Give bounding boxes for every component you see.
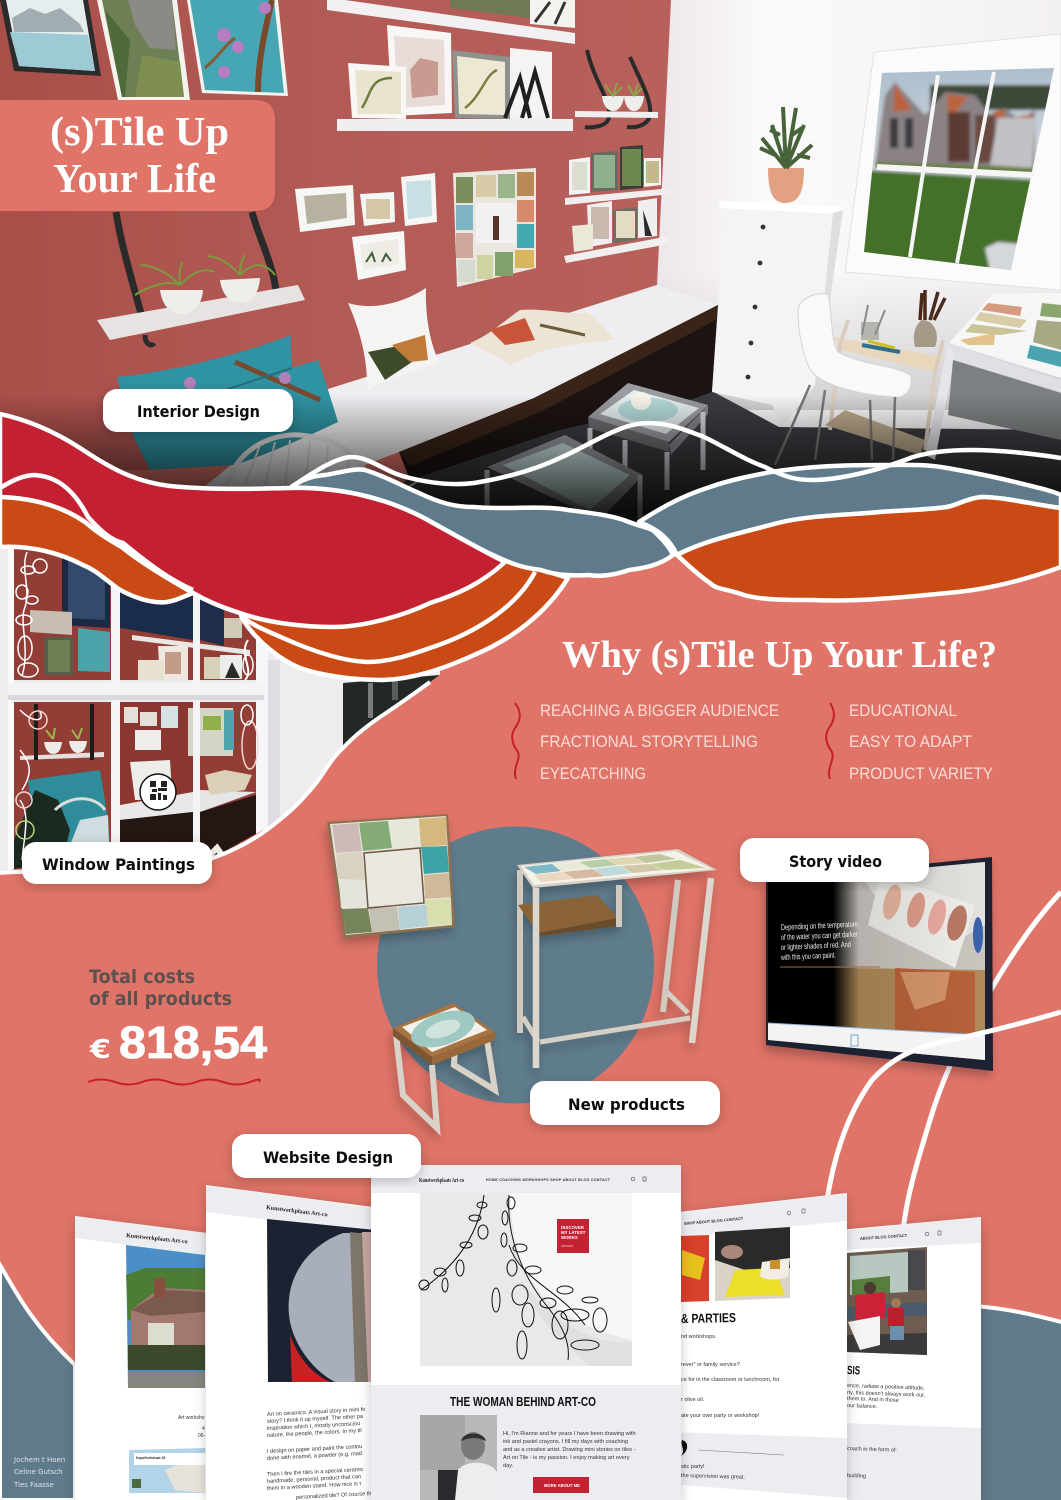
article text: nature, the people, the colors. In my til [267, 1428, 362, 1439]
dark pane [343, 675, 440, 748]
tile panel on wall [453, 168, 536, 287]
website page 5: SIS [847, 1363, 860, 1377]
white boundary line of coral panel [0, 682, 430, 873]
red squiggle underline [88, 1080, 260, 1084]
portrait photo [420, 1415, 497, 1500]
about section: ink and pastel crayons. I fill my days with coaching [503, 1439, 628, 1445]
website page 4: r olive oil. [681, 1397, 705, 1403]
label: story video [740, 838, 929, 882]
website page 1: Kunstwerkplaats Art-co [126, 1233, 188, 1245]
website page 5: rly, this doesn't always work out. [847, 1390, 926, 1399]
work table with tiles [925, 293, 1061, 460]
website page center: Kunstwerkplaats Art-co [419, 1177, 464, 1184]
credits: Ties Faasse [13, 1481, 54, 1489]
about section: day. [503, 1463, 514, 1469]
label: interior design: Interior Design [137, 402, 260, 421]
right wall shelves and plant [564, 50, 672, 263]
list: benefits left: REACHING A BIGGER AUDIENCE [540, 702, 779, 720]
article text: done with enamel, a powder (e.g. mad [267, 1451, 362, 1462]
discover red tag: DISCOVER [561, 1225, 585, 1230]
orange band right [677, 497, 1061, 600]
article text: story? I think it up myself. The other pa [267, 1414, 364, 1425]
about me button [533, 1477, 589, 1493]
red band [0, 414, 505, 627]
blue product circle [377, 826, 654, 1104]
red feature wall [0, 0, 671, 470]
website page center [371, 1165, 681, 1500]
website page 5: ence, radiate a positive attitude, [847, 1383, 925, 1392]
map [129, 1448, 205, 1493]
white curve behind monitor [903, 892, 1061, 1230]
article text: handmade, personal, product that can [267, 1474, 361, 1485]
title box: Your Life [53, 155, 216, 201]
about section: Art on Tile - is my passion. I enjoy making art every [503, 1455, 630, 1461]
bottom right blue shape [975, 1306, 1061, 1500]
hero image with plate and line drawing [419, 1193, 632, 1366]
list: benefits right: EDUCATIONAL [849, 702, 957, 720]
website page 5: them to. And in those [847, 1396, 899, 1404]
title box [0, 100, 275, 211]
panel: window paintings scene [0, 540, 440, 880]
darkening floor gradient [0, 395, 1061, 510]
photo: painting a mug [715, 1227, 790, 1301]
orange band middle line [243, 572, 535, 662]
console table product [517, 849, 717, 1068]
squiggle left [512, 703, 520, 779]
article text: Then I fire the tiles in a special ceramic [267, 1467, 364, 1478]
article text: inspiration which I, mostly unconsciou [267, 1421, 361, 1432]
monitor caption: Depending on the temperature [781, 920, 858, 932]
window [845, 34, 1061, 290]
trolley with brushes [825, 290, 945, 455]
website page 4: the supervision was great. [681, 1473, 745, 1481]
window frames [8, 540, 268, 870]
credits: Jochem t Hoen [13, 1456, 65, 1464]
white floral window drawing [16, 552, 258, 860]
website page 4: ce for in the classroom or lunchroom, for [681, 1377, 780, 1383]
list: benefits left: FRACTIONAL STORYTELLING [540, 733, 758, 751]
list: benefits right [826, 702, 993, 783]
white art pillows [348, 288, 615, 390]
article text [267, 1407, 372, 1500]
orange band left [0, 497, 193, 602]
lower orange band [240, 558, 568, 680]
about section [371, 1385, 681, 1500]
list: benefits right: PRODUCT VARIETY [849, 765, 993, 783]
floor [402, 392, 1061, 522]
tile mirror product [327, 814, 455, 938]
website page 4: nd workshops. [681, 1334, 717, 1340]
website page 1: Art worksho [178, 1415, 205, 1421]
label: interior design [103, 389, 293, 432]
panel: interior design room scene [0, 0, 1061, 560]
website page 5 [840, 1217, 981, 1500]
quote mark [681, 1440, 687, 1456]
shelves and frames [327, 0, 575, 131]
teal pillows [117, 335, 338, 470]
website page 4: & PARTIES [681, 1310, 736, 1326]
photo: house [126, 1245, 205, 1388]
discover red tag [557, 1219, 589, 1253]
label: story video: Story video [789, 852, 882, 871]
bottom left blue shape [0, 1265, 75, 1500]
discover red tag: WORKS [561, 1235, 578, 1240]
article text: I design on paper and paint the contou [267, 1444, 362, 1455]
stools on the floor [487, 383, 708, 520]
monitor caption [780, 920, 858, 962]
website page 4: rever" or family service? [681, 1362, 740, 1368]
dresser with plant [712, 107, 843, 427]
window pane contents [14, 545, 256, 870]
price: € [89, 1035, 111, 1065]
total costs label [89, 966, 232, 1010]
total costs label: of all products [89, 988, 232, 1010]
about section: Hi, I'm Rianne and for years I have been drawing with [503, 1431, 636, 1437]
small wall frames [295, 173, 437, 280]
website page 4: ate your own party or workshop! [681, 1413, 760, 1419]
article text: Art on ceramics. A visual story in mini fo [267, 1407, 366, 1418]
map: Kapelhofstraat 29 [136, 1456, 165, 1460]
wave bands [0, 414, 1061, 680]
stool product [393, 1003, 495, 1128]
website page 2 [206, 1185, 380, 1500]
window wall [0, 540, 440, 880]
red band inner loop line [0, 475, 193, 590]
squiggle right [826, 703, 834, 779]
label: new products [530, 1081, 720, 1125]
price: 818,54 [119, 1017, 267, 1068]
label: new products: New products [568, 1095, 685, 1114]
discover red tag: MY LATEST [561, 1230, 586, 1235]
list: benefits left [512, 702, 779, 783]
label: window paintings: Window Paintings [42, 855, 195, 874]
blue band left [291, 470, 673, 576]
label: window paintings [22, 842, 212, 884]
website page center: HOME COACHING WORKSHOPS SHOP ABOUT BLOG CONTACT [486, 1178, 611, 1182]
website page 5: our balance. [847, 1403, 878, 1410]
article text: them in a wooden stand. How nice is t [267, 1481, 362, 1492]
monitor caption: of the water you can get darker [781, 930, 858, 942]
chair [775, 294, 911, 465]
label: website design [232, 1134, 421, 1178]
website page 5: ABOUT BLOG CONTACT [860, 1233, 908, 1241]
website page 5: coach in the form of: [847, 1446, 897, 1454]
upper thin wave line [291, 423, 1061, 487]
list: benefits right: EASY TO ADAPT [849, 733, 972, 751]
story video monitor [766, 857, 993, 1071]
coral main panel [0, 540, 1061, 1500]
hanging shelf with plants [97, 212, 305, 345]
about section: THE WOMAN BEHIND ART-CO [450, 1394, 596, 1409]
label: website design: Website Design [263, 1148, 393, 1167]
title box: (s)Tile Up [50, 108, 229, 154]
about section: and as a creative artist. Drawing mini stories on tiles - [503, 1447, 636, 1453]
header icons [631, 1177, 646, 1181]
monitor caption: with this you can paint. [780, 951, 836, 962]
framed artwork top left [0, 0, 288, 100]
heading: why stile up your life: Why (s)Tile Up Your Life? [562, 634, 997, 676]
website page 2: Kunstwerkplaats Art-co [266, 1205, 328, 1219]
website page 4: stic party! [681, 1464, 705, 1470]
monitor caption: or lighter shades of red. And [781, 940, 851, 952]
website page 4: SHOP ABOUT BLOG CONTACT [684, 1216, 744, 1226]
wicker chair [233, 432, 418, 487]
website page 1: 06- [198, 1433, 206, 1439]
website page 5: building [847, 1473, 866, 1480]
blue band right [639, 465, 1061, 555]
white side wall [640, 0, 1061, 470]
total costs block [88, 966, 267, 1084]
photo: woman and boy [847, 1247, 927, 1355]
about me button: MORE ABOUT ME [544, 1483, 580, 1488]
photo: painted tiles [681, 1235, 709, 1302]
QR code sticker [140, 774, 176, 810]
list: benefits left: EYECATCHING [540, 765, 646, 783]
website page 1: 4 [202, 1426, 205, 1432]
bench seat [200, 285, 718, 490]
credits [13, 1456, 65, 1489]
website page 4 [670, 1193, 847, 1500]
white curve over monitor [827, 1012, 1061, 1200]
artwork photo [267, 1219, 375, 1382]
website page 1 [75, 1216, 215, 1500]
credits: Celine Gutsch [14, 1468, 63, 1476]
total costs label: Total costs [89, 966, 195, 988]
